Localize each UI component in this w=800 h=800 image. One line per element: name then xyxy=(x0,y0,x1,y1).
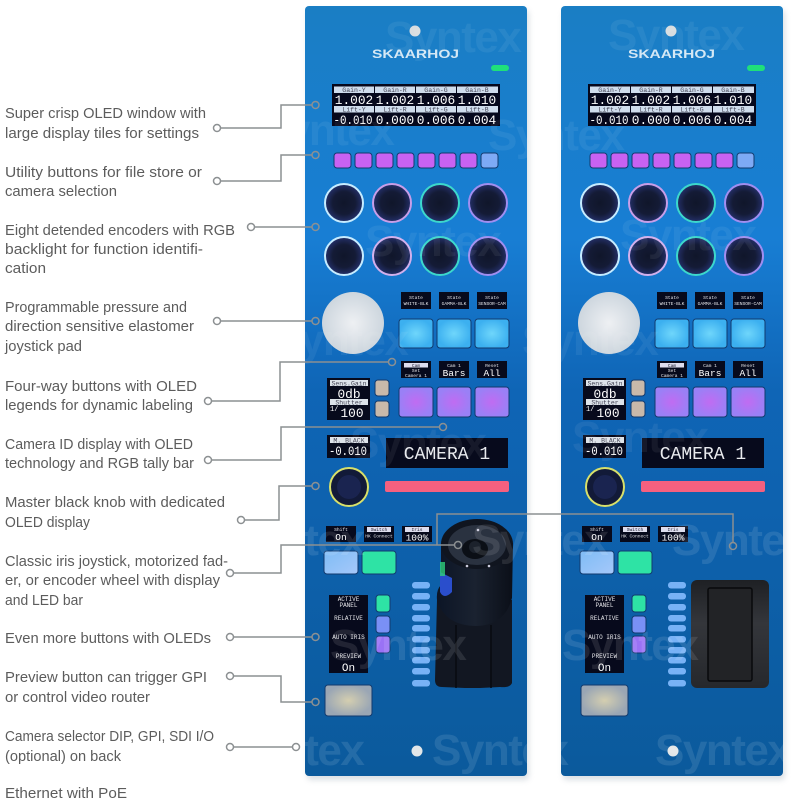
label: master black knob: OLED display xyxy=(5,515,91,531)
leader line: preview button xyxy=(226,672,319,706)
small buttons beside tall OLED xyxy=(376,595,390,653)
watermarks: Syntex xyxy=(620,211,757,260)
label: four-way buttons: legends for dynamic labeling xyxy=(5,398,193,414)
gain and shutter OLED: Shutter xyxy=(335,400,363,406)
label: camera ID: technology and RGB tally bar xyxy=(5,456,194,472)
OLED row above lower buttons: Switch xyxy=(627,527,644,533)
top screw xyxy=(410,26,420,36)
label: master black knob: Master black knob with dedicated xyxy=(5,495,225,511)
gain and shutter OLED: 100 xyxy=(596,406,620,421)
panel: right controller with motorized fader xyxy=(561,6,785,780)
OLED legends row 2: All xyxy=(483,368,501,379)
OLED window with settings tiles: Lift-G xyxy=(424,106,448,114)
utility buttons xyxy=(590,153,754,168)
label: encoders: Eight detended encoders with RGB xyxy=(5,223,235,239)
OLED window with settings tiles: Gain-R xyxy=(383,87,407,94)
purple four-way buttons xyxy=(655,387,765,417)
OLED legends row 1: SENSOR-CAM xyxy=(478,301,506,307)
label: joystick pad xyxy=(4,300,194,355)
tall OLED legends: AUTO IRIS xyxy=(332,634,365,641)
label: master black knob xyxy=(5,495,225,531)
bottom screw xyxy=(412,746,422,756)
small beige buttons xyxy=(375,380,389,417)
label: preview button xyxy=(5,670,207,706)
gain and shutter OLED: Sens.Gain xyxy=(331,380,367,388)
leader line: OLED window xyxy=(214,102,319,132)
camera ID display: CAMERA 1 xyxy=(404,445,490,465)
label: iris joystick: er, or encoder wheel with display xyxy=(5,573,221,589)
tall OLED legends: PREVIEW xyxy=(336,653,361,660)
camera ID display: CAMERA 1 xyxy=(660,445,746,465)
watermarks: Syntex xyxy=(365,217,502,266)
watermarks: Syntex xyxy=(522,316,659,365)
gain and shutter OLED xyxy=(583,378,626,421)
tall OLED legends xyxy=(329,595,368,675)
leader line: camera ID xyxy=(204,424,446,464)
leader line: four-way buttons xyxy=(204,358,396,404)
OLED legends row 1: State xyxy=(485,295,499,301)
OLED legends row 2: Cam 1 xyxy=(703,363,717,369)
watermarks: Syntex xyxy=(572,413,709,462)
panel: left controller with iris joystick xyxy=(305,6,529,780)
OLED window with settings tiles: Gain-R xyxy=(639,87,663,94)
camera ID display xyxy=(642,438,764,468)
gain and shutter OLED xyxy=(327,378,370,421)
tall OLED legends: On xyxy=(342,663,355,675)
preview button xyxy=(325,685,372,716)
label: utility buttons: Utility buttons for file store or xyxy=(5,165,202,181)
OLED window with settings tiles: Gain-B xyxy=(465,87,489,94)
preview button xyxy=(581,685,628,716)
label: rear connectors xyxy=(5,729,214,765)
OLED window with settings tiles: 1.006 xyxy=(673,93,711,108)
OLED window with settings tiles: Gain-G xyxy=(680,87,704,94)
two lower buttons xyxy=(580,551,652,574)
OLED legends row 1: GAMMA-BLK xyxy=(698,301,723,307)
watermarks: Syntex xyxy=(472,516,609,565)
OLED window with settings tiles: Gain-Y xyxy=(342,87,366,94)
OLED legends row 2: Cam xyxy=(412,363,420,369)
OLED window with settings tiles: 1.010 xyxy=(714,93,752,108)
panel body xyxy=(305,6,527,776)
OLED window with settings tiles: 1.010 xyxy=(458,93,496,108)
joystick pad xyxy=(322,292,384,354)
status LED xyxy=(491,65,509,71)
gain and shutter OLED: 1/ xyxy=(586,406,594,414)
label: OLED window: large display tiles for settings xyxy=(5,126,199,142)
OLED legends row 2: Reset xyxy=(485,363,499,369)
leader line: utility buttons xyxy=(214,152,319,184)
label: rear connectors: (optional) on back xyxy=(5,749,122,765)
OLED window with settings tiles: 0.004 xyxy=(714,113,753,128)
label: utility buttons xyxy=(5,165,202,200)
label: camera ID: Camera ID display with OLED xyxy=(5,437,193,453)
OLED legends row 2: Reset xyxy=(741,363,755,369)
watermarks: Syntex xyxy=(228,516,365,565)
label: preview button: Preview button can trigger GPI xyxy=(5,670,207,686)
master black OLED: M. BLACK xyxy=(589,438,621,444)
gain and shutter OLED: Sens.Gain xyxy=(587,380,623,388)
tall OLED legends: PREVIEW xyxy=(592,653,617,660)
OLED window with settings tiles: 1.002 xyxy=(591,93,629,108)
watermarks: Syntex xyxy=(562,621,699,670)
master black OLED xyxy=(583,435,626,459)
OLED legends row 2: Cam 1 xyxy=(447,363,461,369)
OLED window with settings tiles: 0.006 xyxy=(673,113,711,128)
OLED window with settings tiles: Lift-B xyxy=(465,106,489,114)
label: rear connectors: Camera selector DIP, GPI, SDI I/O xyxy=(5,729,214,745)
status LED xyxy=(747,65,765,71)
OLED window with settings tiles: 1.002 xyxy=(376,93,414,108)
label: encoders: cation xyxy=(5,261,46,277)
OLED window with settings tiles: Lift-R xyxy=(383,106,407,114)
OLED window with settings tiles: 0.006 xyxy=(417,113,455,128)
OLED row above lower buttons: HK Connect xyxy=(621,534,649,540)
OLED row above lower buttons: Iris xyxy=(411,527,423,533)
label: four-way buttons: Four-way buttons with OLED xyxy=(5,379,197,395)
top screw xyxy=(666,26,676,36)
OLED legends row 1: WHITE-BLK xyxy=(404,301,429,307)
OLED row above lower buttons xyxy=(326,526,432,544)
tall OLED legends: AUTO IRIS xyxy=(588,634,621,641)
watermarks: Syntex xyxy=(350,419,487,468)
label: encoders: backlight for function identifi- xyxy=(5,242,203,258)
cyan four-way buttons xyxy=(399,319,509,348)
OLED window with settings tiles: Lift-Y xyxy=(598,106,622,114)
OLED window with settings tiles: Lift-Y xyxy=(342,106,366,114)
OLED row above lower buttons: Shift xyxy=(334,527,348,533)
OLED window with settings tiles xyxy=(588,84,756,128)
master black OLED: -0.010 xyxy=(585,444,623,459)
watermarks: Syntex xyxy=(272,316,409,365)
OLED legends row 1: State xyxy=(741,295,755,301)
OLED window with settings tiles: -0.010 xyxy=(590,113,628,128)
label: four-way buttons xyxy=(5,379,197,414)
tall OLED legends: PANEL xyxy=(339,602,358,609)
OLED row above lower buttons: 100% xyxy=(662,532,685,544)
tall OLED legends: On xyxy=(598,663,611,675)
tall OLED legends: ACTIVE xyxy=(338,596,360,603)
OLED legends row 1: State xyxy=(409,295,423,301)
OLED legends row 1: GAMMA-BLK xyxy=(442,301,467,307)
label: more OLED buttons: Even more buttons with OLEDs xyxy=(5,631,211,647)
OLED window with settings tiles: -0.010 xyxy=(334,113,372,128)
OLED window with settings tiles: Gain-B xyxy=(721,87,745,94)
eight RGB encoders xyxy=(581,184,763,275)
OLED window with settings tiles: 1.006 xyxy=(417,93,455,108)
tall OLED legends xyxy=(585,595,624,675)
label: OLED window xyxy=(5,106,206,142)
master black OLED xyxy=(327,435,370,459)
OLED row above lower buttons: Shift xyxy=(590,527,604,533)
OLED legends row 2 xyxy=(657,361,763,379)
leader line: master black knob xyxy=(238,482,319,524)
watermarks: Syntex xyxy=(385,13,522,62)
label: joystick pad: direction sensitive elastomer xyxy=(5,319,194,335)
two lower buttons xyxy=(324,551,396,574)
label: OLED window: Super crisp OLED window with xyxy=(5,106,206,122)
OLED row above lower buttons: On xyxy=(335,532,347,543)
gain and shutter OLED: 100 xyxy=(340,406,364,421)
LED bar xyxy=(412,582,430,686)
label: iris joystick: Classic iris joystick, motorized fad- xyxy=(5,554,228,570)
OLED window with settings tiles: 0.000 xyxy=(376,113,414,128)
OLED window with settings tiles: 0.000 xyxy=(632,113,670,128)
OLED window with settings tiles: 1.002 xyxy=(632,93,670,108)
OLED window with settings tiles xyxy=(332,84,500,128)
tall OLED legends: RELATIVE xyxy=(334,615,363,622)
label: encoders xyxy=(5,223,235,277)
joystick pad xyxy=(578,292,640,354)
OLED legends row 2: Bars xyxy=(443,368,465,379)
OLED legends row 1: State xyxy=(665,295,679,301)
OLED row above lower buttons: HK Connect xyxy=(365,534,393,540)
watermarks: Syntex xyxy=(432,726,569,775)
utility buttons xyxy=(334,153,498,168)
label: joystick pad: Programmable pressure and xyxy=(5,300,187,316)
tall OLED legends: ACTIVE xyxy=(594,596,616,603)
camera ID display xyxy=(386,438,508,468)
watermarks: Syntex xyxy=(608,11,745,60)
label: iris joystick xyxy=(5,554,228,609)
leader line: rear connectors xyxy=(226,744,300,750)
OLED legends row 2: Camera 1 xyxy=(405,373,427,379)
OLED legends row 2: Cam xyxy=(668,363,676,369)
OLED window with settings tiles: Gain-Y xyxy=(598,87,622,94)
RGB tally bar xyxy=(385,481,509,492)
OLED legends row 1: State xyxy=(447,295,461,301)
tall OLED legends: PANEL xyxy=(595,602,614,609)
gain and shutter OLED: 0db xyxy=(337,387,361,402)
RGB tally bar xyxy=(641,481,765,492)
OLED legends row 1: SENSOR-CAM xyxy=(734,301,762,307)
OLED legends row 2: Set xyxy=(412,368,420,374)
OLED window with settings tiles: Lift-B xyxy=(721,106,745,114)
OLED row above lower buttons: 100% xyxy=(406,532,429,544)
leader line: iris joystick and fader xyxy=(226,514,736,576)
OLED window with settings tiles: 0.004 xyxy=(458,113,497,128)
tall OLED legends: RELATIVE xyxy=(590,615,619,622)
OLED window with settings tiles: 1.002 xyxy=(335,93,373,108)
panel body xyxy=(561,6,783,776)
leader line: encoders xyxy=(248,224,319,230)
watermarks xyxy=(228,11,800,775)
gain and shutter OLED: Shutter xyxy=(591,400,619,406)
gain and shutter OLED: 1/ xyxy=(330,406,338,414)
label: utility buttons: camera selection xyxy=(5,184,117,200)
label: iris joystick: and LED bar xyxy=(5,593,83,609)
cyan four-way buttons xyxy=(655,319,765,348)
label: preview button: or control video router xyxy=(5,690,150,706)
OLED window with settings tiles: Gain-G xyxy=(424,87,448,94)
OLED window with settings tiles: Lift-R xyxy=(639,106,663,114)
LED bar xyxy=(668,582,686,686)
purple four-way buttons xyxy=(399,387,509,417)
watermarks: Syntex xyxy=(655,726,792,775)
leader line: joystick pad xyxy=(214,318,319,324)
master black knob xyxy=(586,468,624,506)
OLED legends row 2: All xyxy=(739,368,757,379)
OLED legends row 2: Set xyxy=(668,368,676,374)
small buttons beside tall OLED xyxy=(632,595,646,653)
leader line: more OLED buttons xyxy=(226,634,319,640)
brand logo: SKAARHOJ xyxy=(372,47,459,61)
OLED legends row 1 xyxy=(401,292,507,309)
brand logo: SKAARHOJ xyxy=(628,47,715,61)
OLED legends row 2: Camera 1 xyxy=(661,373,683,379)
eight RGB encoders xyxy=(325,184,507,275)
small beige buttons xyxy=(631,380,645,417)
motorized fader xyxy=(691,580,769,688)
OLED row above lower buttons: Iris xyxy=(667,527,679,533)
OLED window with settings tiles: Lift-G xyxy=(680,106,704,114)
watermarks: Syntex xyxy=(330,621,467,670)
OLED row above lower buttons xyxy=(582,526,688,544)
label: camera ID xyxy=(5,437,194,472)
watermarks: Syntex xyxy=(258,106,395,155)
OLED row above lower buttons: Switch xyxy=(371,527,388,533)
watermarks: Syntex xyxy=(228,726,365,775)
gain and shutter OLED: 0db xyxy=(593,387,617,402)
watermarks: Syntex xyxy=(488,111,625,160)
OLED legends row 1: WHITE-BLK xyxy=(660,301,685,307)
master black knob xyxy=(330,468,368,506)
bottom screw xyxy=(668,746,678,756)
OLED legends row 1: State xyxy=(703,295,717,301)
OLED row above lower buttons: On xyxy=(591,532,603,543)
label: joystick pad: joystick pad xyxy=(4,339,82,355)
master black OLED: -0.010 xyxy=(329,444,367,459)
master black OLED: M. BLACK xyxy=(333,438,365,444)
OLED legends row 2 xyxy=(401,361,507,379)
OLED legends row 2: Bars xyxy=(699,368,721,379)
iris joystick xyxy=(435,519,513,688)
OLED legends row 1 xyxy=(657,292,763,309)
